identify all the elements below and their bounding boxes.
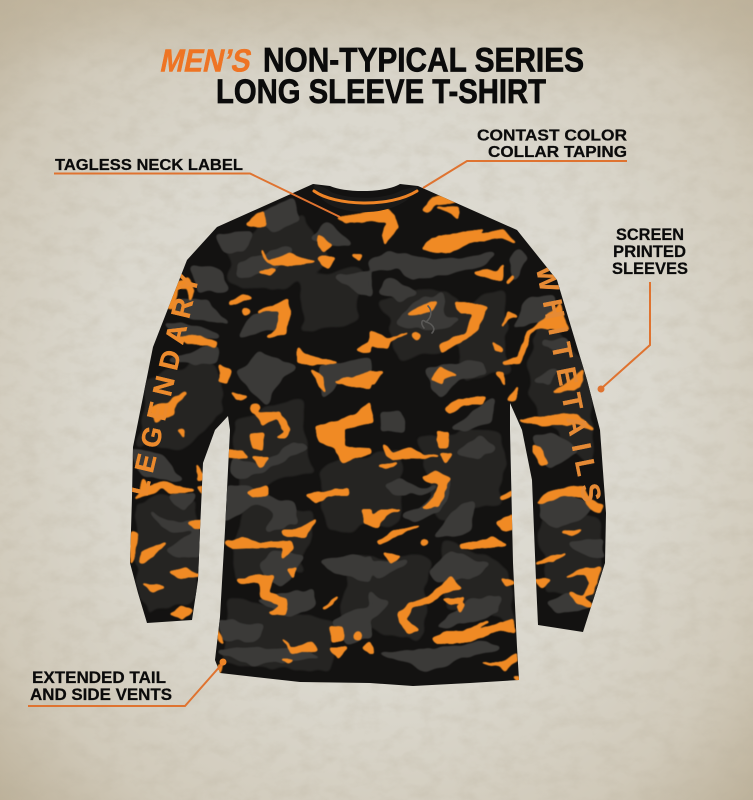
callout label bbox=[477, 128, 627, 161]
collar with contrast taping bbox=[313, 184, 418, 212]
callout label: EXTENDED TAIL bbox=[32, 669, 166, 687]
title line 1: NON-TYPICAL SERIES bbox=[263, 42, 584, 80]
callout: tagless neck label bbox=[54, 157, 340, 217]
callout label: SCREEN bbox=[616, 225, 684, 244]
callout dot bbox=[598, 386, 604, 392]
callout leader line bbox=[603, 282, 650, 387]
callout label bbox=[30, 669, 172, 704]
callout: screen printed sleeves bbox=[598, 225, 688, 392]
callout label: TAGLESS NECK LABEL bbox=[55, 157, 243, 174]
title line 2: LONG SLEEVE T-SHIRT bbox=[216, 73, 546, 111]
shirt illustration bbox=[124, 184, 607, 686]
callout label: SLEEVES bbox=[612, 259, 688, 278]
title bbox=[158, 42, 584, 111]
dark grey camo patches bbox=[135, 215, 600, 670]
callout leader line bbox=[423, 161, 627, 188]
orange camo patches bbox=[130, 197, 603, 681]
callout dot bbox=[220, 658, 226, 666]
grey camo patches bbox=[133, 200, 603, 670]
callout leader line bbox=[28, 664, 222, 706]
callout label bbox=[612, 225, 688, 278]
chest logo bbox=[422, 306, 434, 333]
sleeve print: WHITETAILS: WHITETAILS bbox=[530, 263, 607, 504]
callout: extended tail and side vents bbox=[28, 658, 226, 706]
callout label: AND SIDE VENTS bbox=[30, 686, 172, 704]
callout label: COLLAR TAPING bbox=[488, 144, 627, 161]
sleeve print: LEGENDARY: LEGENDARY bbox=[124, 272, 205, 498]
callout: collar taping bbox=[423, 128, 627, 188]
callout label: CONTAST COLOR bbox=[477, 128, 627, 144]
callout label: PRINTED bbox=[613, 242, 686, 261]
callout leader line bbox=[54, 174, 340, 217]
camo pattern bbox=[124, 197, 607, 681]
shirt silhouette bbox=[130, 184, 606, 686]
title accent: MEN'S: MEN’S bbox=[158, 43, 255, 78]
